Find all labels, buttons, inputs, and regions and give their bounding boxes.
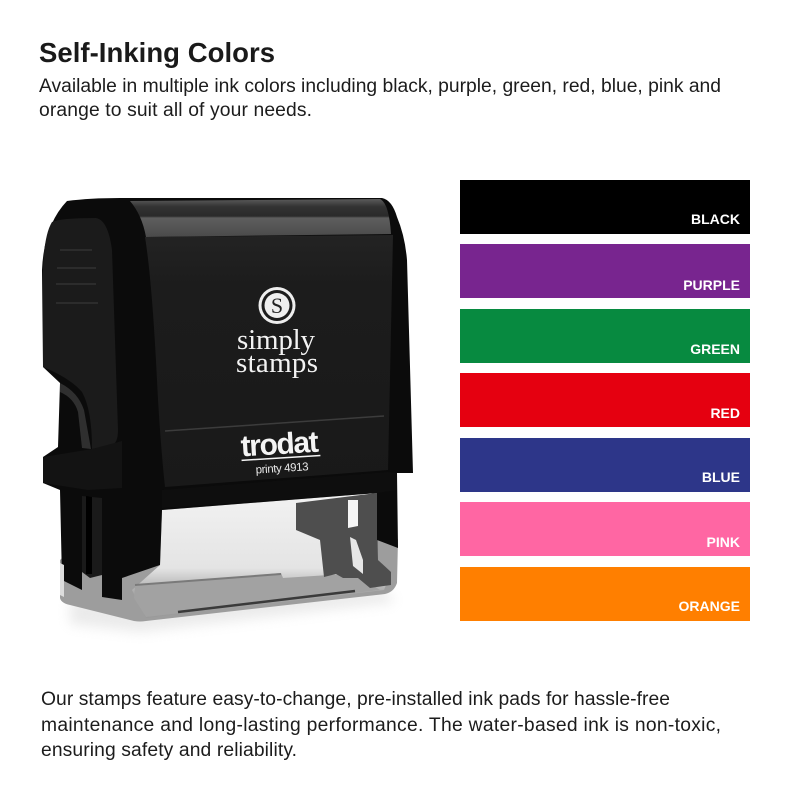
stamp body: [42, 198, 413, 600]
stamp illustration: [42, 198, 413, 632]
color swatch: green: GREEN: [690, 341, 740, 357]
side grip panel: [43, 218, 118, 449]
title: Self-Inking Colors: [39, 37, 275, 68]
color swatch: green: [460, 309, 750, 363]
color swatch: purple: PURPLE: [683, 277, 740, 293]
intro text: [39, 76, 721, 121]
lever curve: [60, 383, 91, 449]
color swatch: black: BLACK: [691, 211, 740, 227]
front panel: [145, 235, 393, 487]
intro text: Available in multiple ink colors including black, purple, green, red, blue, pink and: [39, 76, 721, 97]
trodat logo: trodat: [240, 426, 320, 463]
lower band: [162, 472, 397, 508]
footer text: maintenance and long-lasting performance. The water-based ink is non-toxic,: [41, 715, 721, 736]
color swatch: black: [460, 180, 750, 234]
inner mechanism: [296, 493, 391, 588]
color swatch: orange: ORANGE: [679, 598, 740, 614]
simply stamps logo: S: [271, 293, 283, 318]
footer text: [41, 689, 721, 761]
color swatch: red: [460, 373, 750, 427]
clear base: [60, 480, 398, 622]
color swatch: blue: BLUE: [702, 469, 740, 485]
color swatch: pink: [460, 502, 750, 556]
footer text: Our stamps feature easy-to-change, pre-installed ink pads for hassle-free: [41, 689, 670, 710]
trodat logo: printy 4913: [255, 461, 309, 477]
grip ridges: [56, 250, 98, 303]
panel seam: [165, 416, 384, 431]
base flange: [43, 441, 122, 490]
clear window: [132, 493, 390, 618]
color swatch: orange: [460, 567, 750, 621]
footer text: ensuring safety and reliability.: [41, 740, 297, 761]
dark gap in left legs: [82, 496, 102, 578]
simply stamps logo: simply: [237, 324, 316, 356]
color swatch: red: RED: [710, 405, 740, 421]
clear strip beside left leg: [60, 563, 64, 597]
intro text: orange to suit all of your needs.: [39, 100, 312, 121]
color swatch: blue: [460, 438, 750, 492]
simply stamps logo: stamps: [236, 347, 318, 379]
color swatch: purple: [460, 244, 750, 298]
inner tray: [134, 573, 380, 617]
color swatch: pink: PINK: [707, 534, 740, 550]
simply stamps logo: [236, 287, 318, 379]
top clear window: [130, 199, 391, 237]
